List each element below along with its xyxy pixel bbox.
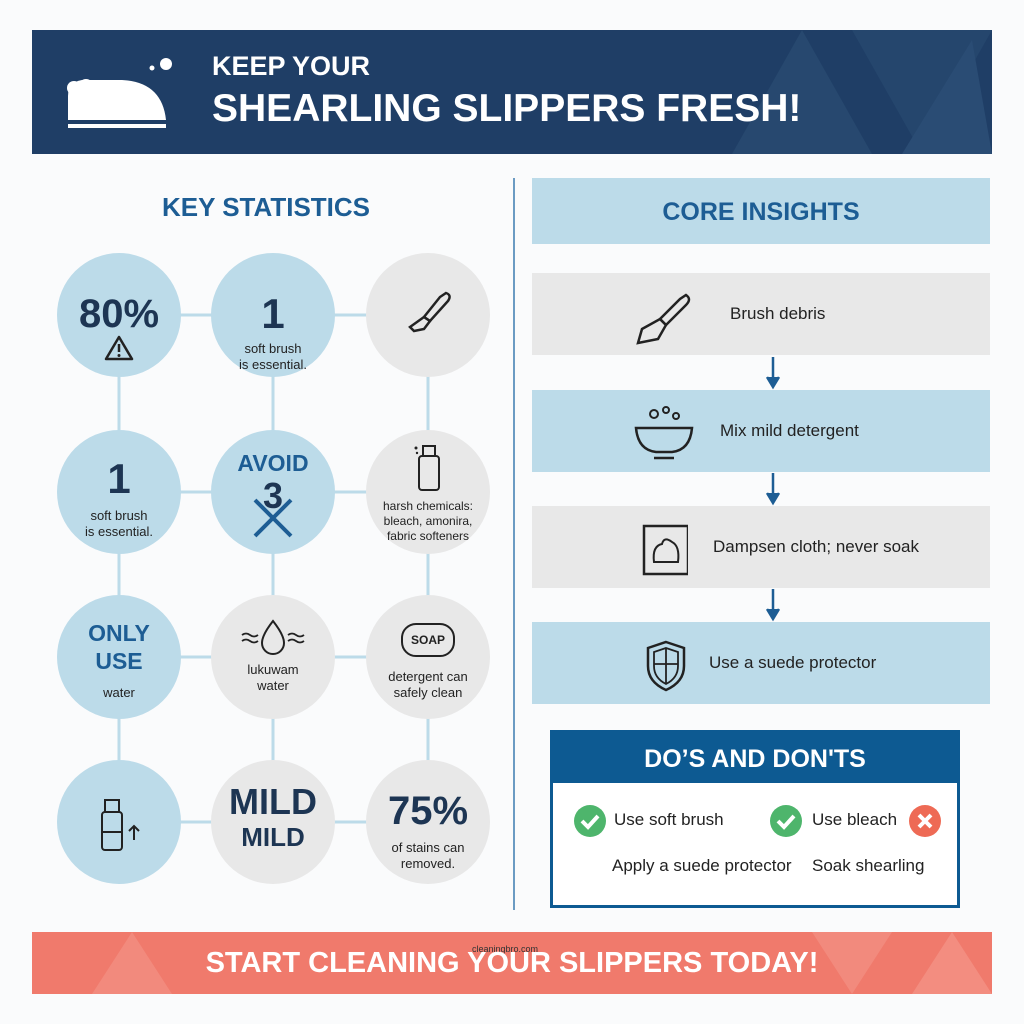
- stat: 80%: [57, 253, 181, 377]
- stat: only use water: ONLY: [88, 620, 150, 646]
- icon: check: [574, 805, 606, 837]
- stat: harsh chemicals: [366, 430, 490, 554]
- stat: mild: [211, 760, 335, 884]
- stat: avoid 3: [211, 430, 335, 554]
- heading: core insights: [532, 178, 990, 244]
- stat: harsh chemicals: bleach, amonira,: [384, 514, 472, 528]
- stat: mild: MILD: [229, 781, 317, 822]
- icon: check: [770, 805, 802, 837]
- title: KEEP YOUR: [212, 51, 370, 81]
- panel: dos and donts: Use soft brush: [614, 810, 724, 829]
- step: suede protector: [532, 622, 990, 704]
- stat: 1 soft brush: 1: [261, 290, 285, 337]
- stat: only use water: [57, 595, 181, 719]
- title: SHEARLING SLIPPERS FRESH!: [212, 87, 801, 130]
- stat: harsh chemicals: harsh chemicals:: [383, 499, 473, 513]
- panel: dos and donts: Use bleach: [812, 810, 897, 829]
- stat: 1 soft brush repeat: [57, 430, 181, 554]
- stat: only use water: USE: [95, 648, 143, 674]
- arrow: [766, 357, 780, 390]
- stat: 1 soft brush repeat: soft brush: [90, 508, 148, 523]
- step: mix detergent: Mix mild detergent: [720, 421, 859, 440]
- stat: 75%: of stains can: [392, 840, 464, 855]
- footer banner: cleaningbro.com: [472, 944, 538, 954]
- divider: [513, 178, 515, 910]
- stat: 1 soft brush: soft brush: [244, 341, 302, 356]
- title: [212, 51, 801, 130]
- stat: 80%: 80%: [79, 292, 159, 336]
- heading: core insights: CORE INSIGHTS: [662, 198, 860, 226]
- icon: spray bottle: [57, 760, 181, 884]
- stat: 1 soft brush repeat: is essential.: [85, 524, 153, 539]
- footer banner: [32, 932, 992, 994]
- header banner: [32, 30, 992, 154]
- stat: 75%: [366, 760, 490, 884]
- stat: detergent: safely clean: [394, 685, 462, 700]
- arrow: [766, 473, 780, 506]
- stat: detergent: detergent can: [388, 669, 468, 684]
- grid connector lines: [118, 314, 430, 824]
- icon: slipper: [67, 58, 172, 128]
- step: brush debris: [532, 273, 990, 355]
- stat: 75%: removed.: [401, 856, 455, 871]
- stat: lukewarm water: [211, 595, 335, 719]
- step: suede protector: Use a suede protector: [709, 653, 876, 672]
- icon: brush: [366, 253, 490, 377]
- stat: avoid 3: 3: [263, 475, 283, 516]
- stat: 1 soft brush: [211, 253, 335, 377]
- panel: statistics circles: [57, 253, 490, 884]
- heading: key statistics: KEY STATISTICS: [162, 192, 370, 222]
- step: brush debris: Brush debris: [730, 304, 825, 323]
- panel: dos and donts: Apply a suede protector: [612, 856, 792, 875]
- stat: harsh chemicals: fabric softeners: [387, 529, 469, 543]
- stat: detergent: SOAP: [411, 633, 445, 647]
- stat: 1 soft brush repeat: 1: [107, 455, 131, 502]
- icon: cross: [909, 805, 941, 837]
- step: dampen cloth: [532, 506, 990, 588]
- stat: detergent: [366, 595, 490, 719]
- stat: mild: MILD: [241, 822, 305, 852]
- heading: dos and donts: DO’S AND DON'TS: [644, 745, 866, 773]
- stat: avoid 3: AVOID: [237, 450, 309, 476]
- stat: lukewarm water: lukuwam: [247, 662, 299, 677]
- stat: lukewarm water: water: [257, 678, 289, 693]
- heading: dos and donts: [553, 733, 957, 783]
- stat: 75%: 75%: [388, 789, 468, 833]
- stat: only use water: water: [103, 685, 135, 700]
- footer text: START CLEANING YOUR SLIPPERS TODAY!: [206, 947, 818, 979]
- stat: 1 soft brush: is essential.: [239, 357, 307, 372]
- step: dampen cloth: Dampsen cloth; never soak: [713, 537, 919, 556]
- panel: dos and donts: [550, 730, 960, 908]
- step: mix detergent: [532, 390, 990, 472]
- panel: dos and donts: Soak shearling: [812, 856, 924, 875]
- arrow: [766, 589, 780, 622]
